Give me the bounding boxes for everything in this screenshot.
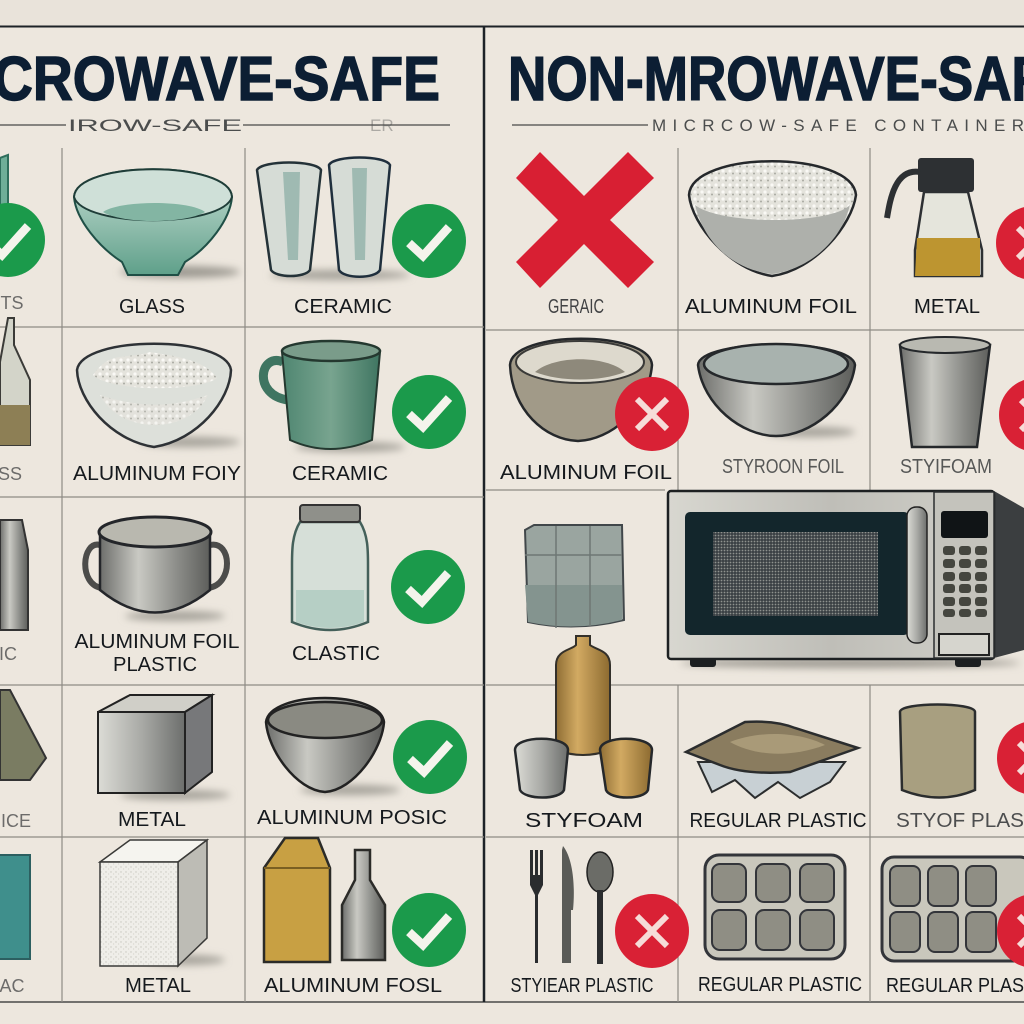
right subheading: MICRCOW-SAFE CONTAINER bbox=[652, 116, 1024, 135]
cell: two glasses: CERAMIC bbox=[294, 296, 392, 318]
cell: foil-filled bowl bbox=[685, 161, 857, 318]
left heading: CROWAVE-SAFE bbox=[0, 45, 440, 114]
left column fragments: TS bbox=[0, 293, 24, 313]
cell: glass bowl: GLASS bbox=[119, 296, 185, 318]
cell: coffee carafe: METAL bbox=[914, 296, 980, 318]
cell: steel bowl: STYROON FOIL bbox=[722, 456, 844, 478]
left subheading bbox=[0, 116, 450, 135]
cell: foam container bbox=[525, 525, 624, 628]
cell: ice-cube style tray bbox=[698, 855, 862, 996]
cell: steel cup bbox=[900, 337, 1024, 478]
cell: foam block: METAL bbox=[125, 975, 191, 997]
cell: two glasses bbox=[257, 158, 466, 318]
cell: foil bowl with cross bbox=[500, 339, 689, 484]
cell: cropped tray bbox=[882, 857, 1024, 997]
left column fragments bbox=[0, 155, 46, 996]
cell: cutlery: STYIEAR PLASTIC bbox=[510, 975, 654, 997]
large red cross bbox=[516, 152, 654, 288]
cell: foam block bbox=[100, 840, 225, 997]
left subheading: ER bbox=[370, 116, 394, 135]
cell: steel cup: STYIFOAM bbox=[900, 456, 992, 478]
microwave bbox=[668, 491, 1024, 668]
cell: foam cup bbox=[896, 704, 1024, 832]
cell: foam cup: STYOF PLAS bbox=[896, 810, 1024, 832]
cell: carton and bottle: ALUMINUM FOSL bbox=[264, 975, 442, 997]
cell: bottle and cups: STYFOAM bbox=[525, 810, 643, 832]
cell: ice-cube style tray: REGULAR PLASTIC bbox=[698, 974, 862, 996]
left column fragments: AC bbox=[0, 976, 25, 996]
cell: cutlery bbox=[510, 846, 689, 997]
cell: metal pot bbox=[74, 517, 240, 676]
cell: foil-filled bowl: ALUMINUM FOIL bbox=[685, 296, 857, 318]
cell: metal box: METAL bbox=[118, 809, 186, 831]
cell: bottle and cups bbox=[515, 636, 652, 832]
cell: foil bowl with cross: ALUMINUM FOIL bbox=[500, 462, 672, 484]
cell: carton and bottle bbox=[264, 838, 466, 997]
cell: glass bowl bbox=[74, 169, 240, 318]
left subheading: IROW-SAFE bbox=[68, 116, 242, 135]
cell: steel bowl bbox=[698, 344, 855, 478]
cell: metal pot: PLASTIC bbox=[113, 654, 197, 676]
cell: glass jar bbox=[292, 505, 465, 665]
cell: foil bowl bbox=[73, 344, 241, 485]
label: geraic: GERAIC bbox=[548, 296, 604, 318]
cell: green mug: CERAMIC bbox=[292, 463, 388, 485]
cell: metal box bbox=[98, 695, 230, 831]
cell: glass jar: CLASTIC bbox=[292, 643, 380, 665]
cell: coffee carafe bbox=[887, 158, 1024, 318]
cell: plastic tray with food bbox=[686, 722, 866, 832]
cell: plastic tray with food: REGULAR PLASTIC bbox=[690, 810, 866, 832]
cell: metal bowl: ALUMINUM POSIC bbox=[257, 807, 447, 829]
cell: metal pot: ALUMINUM FOIL bbox=[74, 631, 240, 653]
cell: metal bowl bbox=[257, 698, 467, 829]
cell: green mug bbox=[263, 341, 466, 485]
cell: foil bowl: ALUMINUM FOIY bbox=[73, 463, 241, 485]
left column fragments: ICE bbox=[1, 811, 31, 831]
